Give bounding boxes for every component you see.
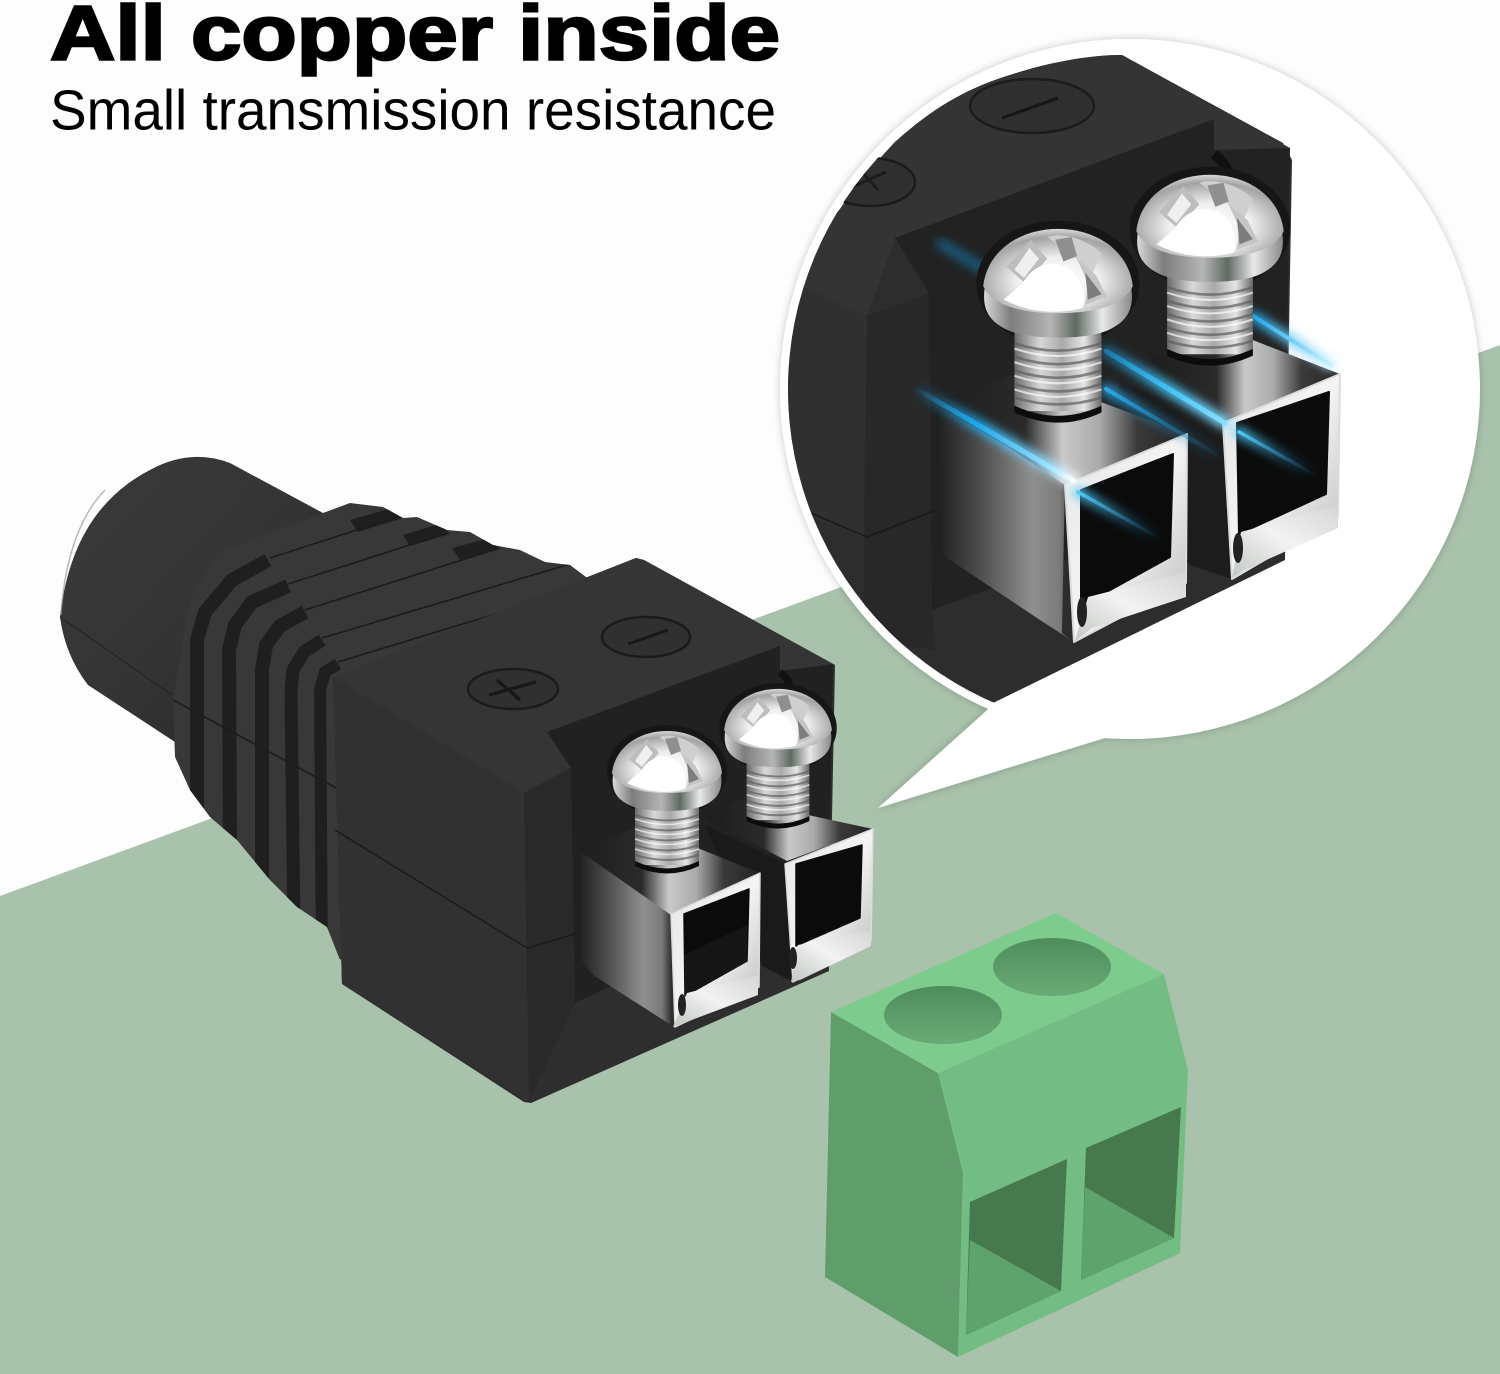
zoomed left screw [976, 221, 1140, 423]
terminal recess [547, 646, 833, 1003]
bubble circle and pointer [780, 39, 1480, 808]
right screw [719, 683, 837, 828]
ribbed boot [173, 503, 600, 960]
green terminal block [825, 913, 1188, 1357]
left screw [607, 725, 727, 874]
short rib shadow patches at the far ends [350, 507, 498, 560]
DC connector [60, 457, 873, 1103]
right wire opening [1081, 1107, 1181, 1280]
zoomed left metal terminal [948, 402, 1188, 643]
zoomed right metal terminal [1187, 340, 1341, 580]
block left face [825, 1012, 963, 1357]
left metal terminal [578, 825, 760, 1027]
block top face [831, 913, 1164, 1073]
housing front face [524, 768, 575, 1102]
zoomed connector view [770, 55, 1340, 705]
minus badge [602, 617, 690, 657]
screw holes [884, 938, 1111, 1044]
zoomed black housing [770, 55, 1292, 705]
housing left face [333, 677, 531, 1103]
zoomed right screw [1130, 167, 1290, 366]
right metal terminal [705, 800, 873, 982]
subtitle: Small transmission resistance [50, 78, 776, 142]
black housing [333, 558, 835, 1103]
housing top face [333, 558, 835, 793]
zoomed plus badge [843, 157, 916, 208]
background: green table surface [0, 345, 1500, 1374]
left wire opening [966, 1159, 1067, 1335]
barrel cylinder [60, 457, 323, 742]
thick dark rib grooves [197, 560, 338, 960]
block front face [938, 974, 1188, 1357]
zoomed blue glow lines [913, 244, 1331, 539]
zoomed minus badge [970, 79, 1094, 133]
thin rib lines [173, 530, 570, 789]
plus badge [468, 669, 558, 709]
callout bubble with zoomed terminal view [770, 39, 1480, 808]
